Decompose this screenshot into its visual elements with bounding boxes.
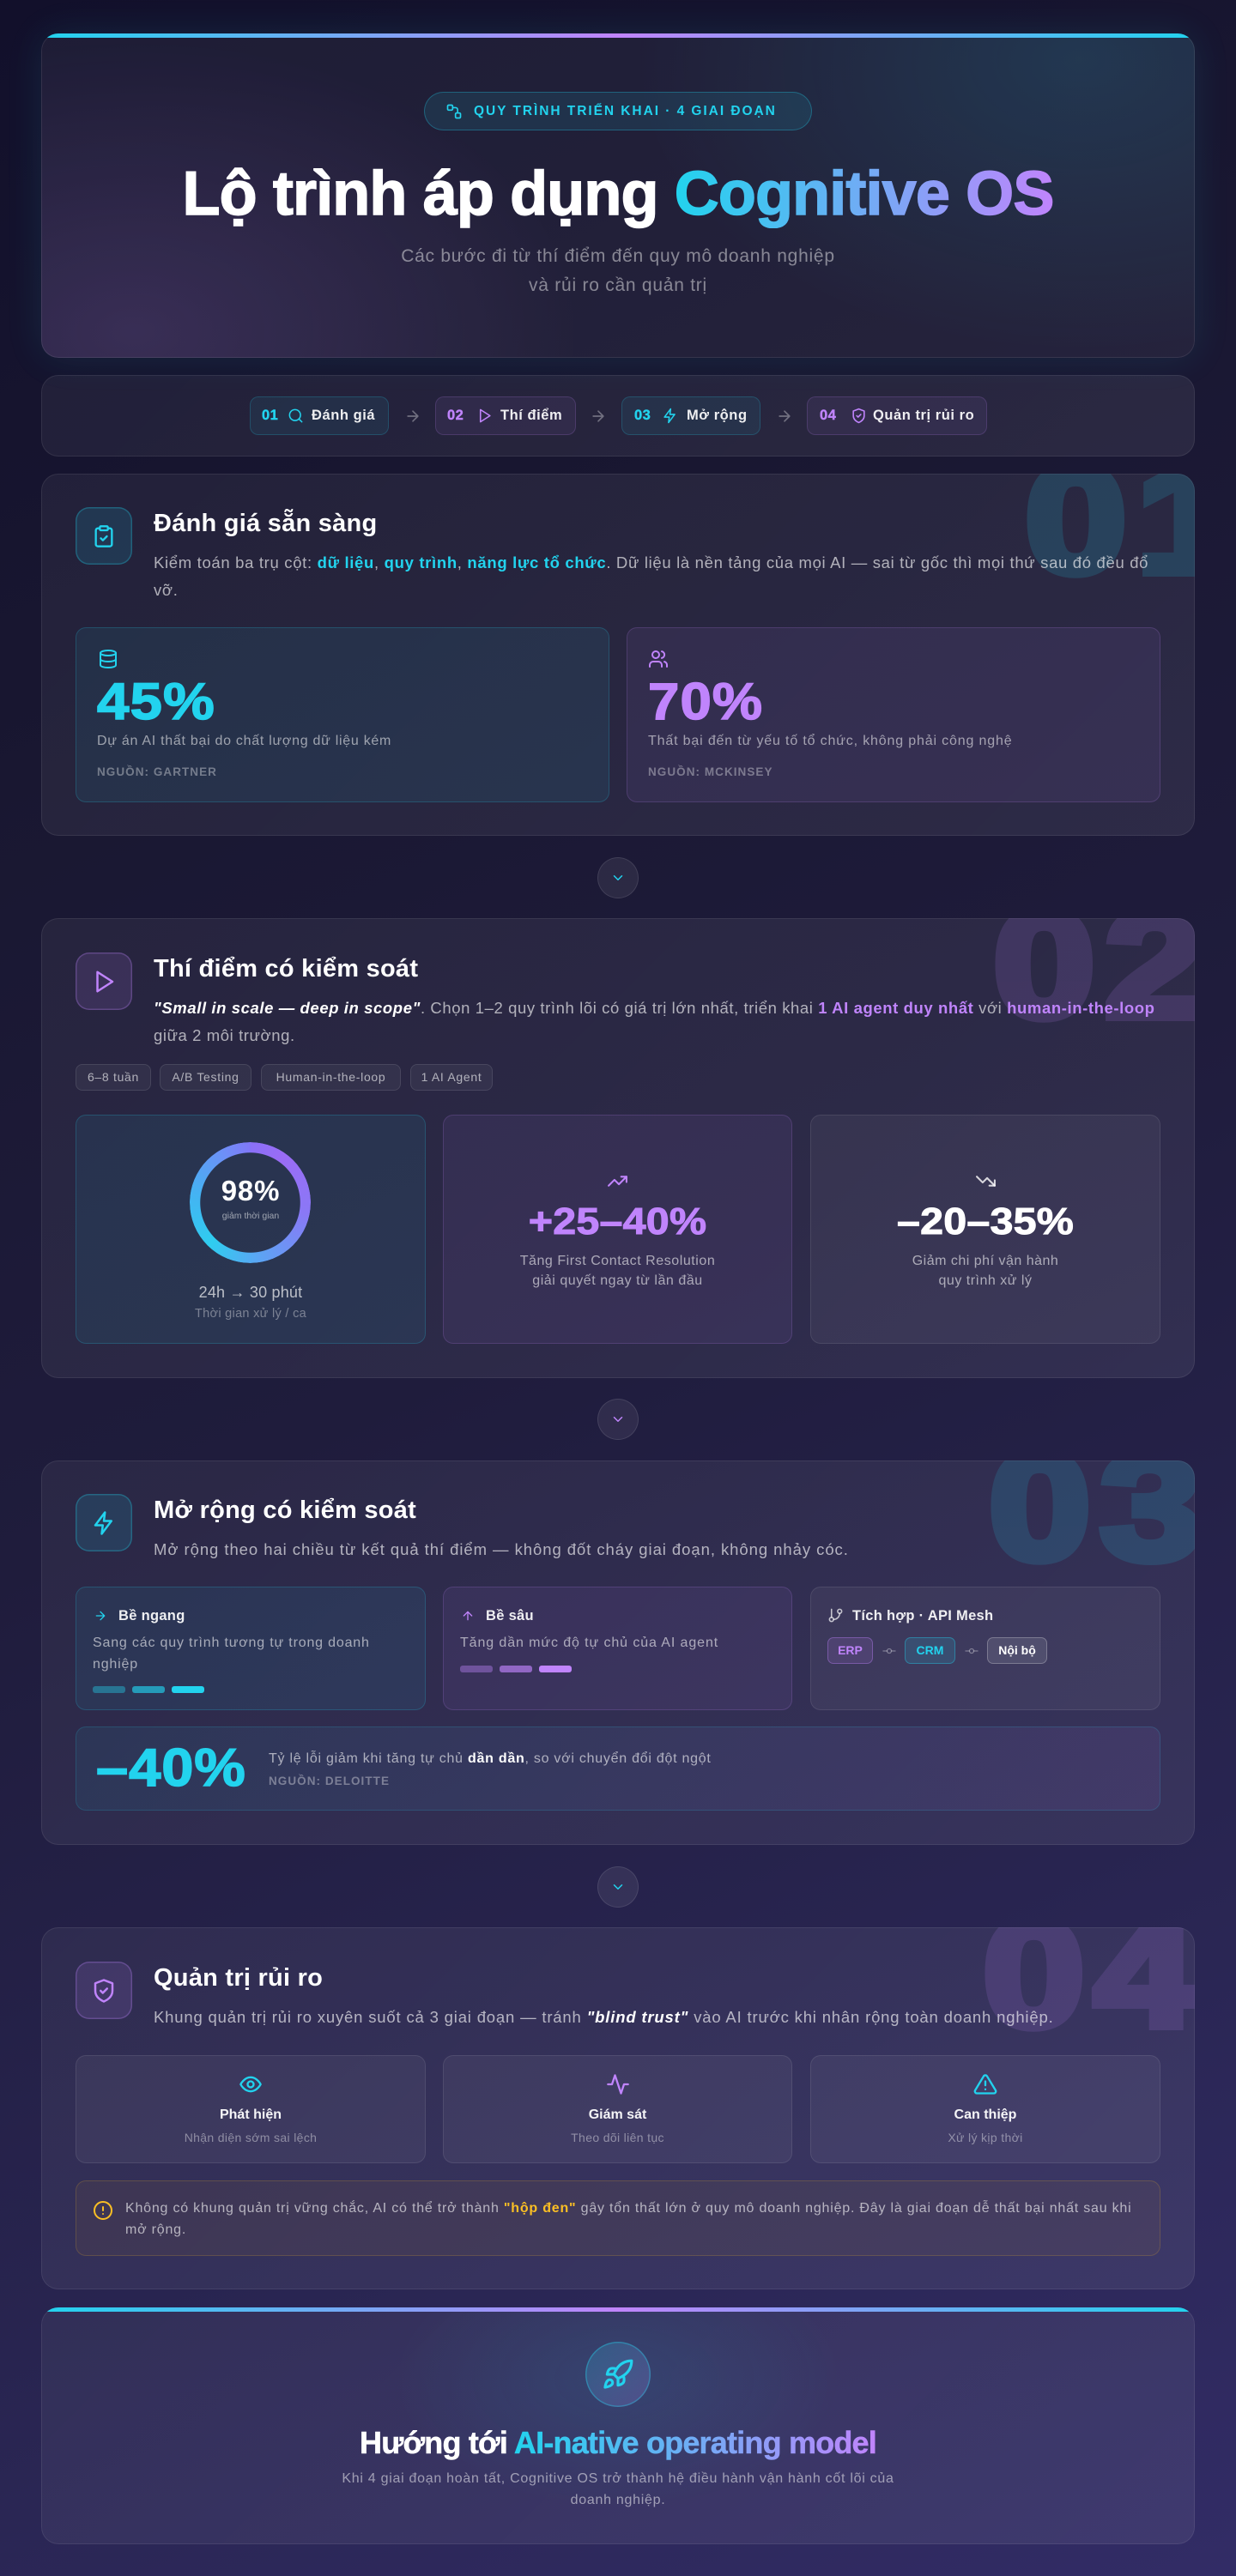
closing panel xyxy=(41,2307,1195,2544)
callout: -40%: Tỷ lệ lỗi giảm khi tăng tự chủ dần dần, so với chuyển đổi đột ngột xyxy=(269,1751,712,1766)
stat card: -20-35% xyxy=(810,1115,1160,1344)
closing text: Khi 4 giai đoạn hoàn tất, Cognitive OS trở thành hệ điều hành vận hành cốt lõi của xyxy=(342,2471,894,2486)
connector chevron 1 xyxy=(597,857,639,898)
heading: Quản trị rủi ro xyxy=(154,1964,323,1992)
tag: 1 AI Agent xyxy=(421,1070,482,1084)
heading: Đánh giá sẵn sàng xyxy=(154,510,377,537)
step 04: Quản trị rủi ro xyxy=(873,408,974,423)
callout: -40% xyxy=(76,1726,1160,1811)
arrow xyxy=(779,410,791,422)
stat card: ring 98%: Thời gian xử lý / ca xyxy=(195,1307,306,1321)
description: "Small in scale — deep in scope". Chọn 1–2 quy trình lõi có giá trị lớn nhất, triển khai 1 AI agent duy nhất với human-in-the-loop xyxy=(154,999,1155,1017)
heading: Mở rộng có kiểm soát xyxy=(154,1497,416,1524)
step 01 xyxy=(250,396,389,435)
tag: Human-in-the-loop xyxy=(276,1070,385,1084)
stat card: +25-40%: Tăng First Contact Resolution xyxy=(520,1254,715,1268)
icon: rocket xyxy=(585,2342,651,2407)
warning callout: Không có khung quản trị vững chắc, AI có thể trở thành "hộp đen" gây tổn thất lớn ở quy mô doanh nghiệp. Đây là giai đoạn dễ thất bại nhất sau khi xyxy=(125,2201,1131,2216)
step 01: 01 xyxy=(262,408,278,423)
warning callout xyxy=(76,2180,1160,2256)
stat card: ring 98% xyxy=(76,1115,426,1344)
stat card: +25-40%: +25–40% xyxy=(529,1200,706,1243)
card: vertical: Bề sâu xyxy=(486,1608,534,1624)
stat card: 45%: NGUỒN: GARTNER xyxy=(97,765,217,778)
step 04: 04 xyxy=(820,408,836,423)
stat card: -20-35%: Giảm chi phí vận hành xyxy=(912,1254,1058,1268)
card: API mesh: CRM xyxy=(917,1643,943,1657)
stat card: 70% xyxy=(627,627,1160,802)
connector chevron 2 xyxy=(597,1399,639,1440)
step 01: Đánh giá xyxy=(312,408,375,423)
card: intervene: Xử lý kịp thời xyxy=(948,2131,1023,2144)
tag xyxy=(410,1064,493,1091)
heading: Thí điểm có kiểm soát xyxy=(154,955,418,983)
description: giữa 2 môi trường. xyxy=(154,1026,295,1043)
badge: process xyxy=(424,92,812,130)
stat card: ring 98%: 24h → 30 phút xyxy=(199,1284,302,1301)
subtitle: Các bước đi từ thí điểm đến quy mô doanh nghiệp xyxy=(401,246,835,266)
card: API mesh: Tích hợp · API Mesh xyxy=(852,1608,993,1624)
card: monitor: Theo dõi liên tục xyxy=(571,2131,664,2144)
phase 02 panel xyxy=(41,918,1195,1378)
description: Khung quản trị rủi ro xuyên suốt cả 3 giai đoạn — tránh "blind trust" vào AI trước khi nhân rộng toàn doanh nghiệp. xyxy=(154,2008,1054,2026)
stat card: +25-40%: giải quyết ngay từ lần đầu xyxy=(532,1273,703,1288)
step 04 xyxy=(807,396,987,435)
stat card: ring 98%: 98% xyxy=(221,1175,280,1206)
description: vỡ. xyxy=(154,580,179,599)
card: intervene: Can thiệp xyxy=(954,2107,1016,2122)
step 02: Thí điểm xyxy=(500,408,562,423)
closing text xyxy=(342,2471,894,2507)
closing text: doanh nghiệp. xyxy=(571,2493,665,2507)
description: Kiểm toán ba trụ cột: dữ liệu, quy trình, năng lực tổ chức. Dữ liệu là nền tảng của mọi AI — sai từ gốc thì mọi thứ sau đó đều đổ xyxy=(154,553,1148,571)
subtitle xyxy=(401,246,835,295)
card: horizontal: Sang các quy trình tương tự trong doanh xyxy=(93,1636,370,1650)
subtitle: và rủi ro cần quản trị xyxy=(529,275,707,295)
stat card: 70%: 70% xyxy=(648,673,763,730)
tag: 6–8 tuần xyxy=(88,1070,139,1084)
card: horizontal: Bề ngang xyxy=(118,1608,185,1624)
card: horizontal: nghiệp xyxy=(93,1656,138,1672)
stat card: ring 98%: giảm thời gian xyxy=(222,1211,279,1221)
ring chart xyxy=(190,1142,311,1263)
stat card: 45%: Dự án AI thất bại do chất lượng dữ liệu kém xyxy=(97,734,391,748)
stepper panel xyxy=(41,375,1195,457)
badge: process: QUY TRÌNH TRIỂN KHAI · 4 GIAI ĐOẠN xyxy=(474,104,777,118)
arrow xyxy=(407,410,419,422)
stat card: +25-40% xyxy=(443,1115,792,1344)
card: vertical: Tăng dần mức độ tự chủ của AI agent xyxy=(460,1636,718,1650)
description xyxy=(154,553,1148,599)
card: API mesh: Nội bộ xyxy=(998,1643,1036,1657)
card: monitor: Giám sát xyxy=(589,2107,646,2122)
closing title: Hướng tới AI-native operating model xyxy=(360,2425,876,2460)
card: API mesh xyxy=(810,1587,1160,1710)
description xyxy=(154,999,1155,1044)
description: Mở rộng theo hai chiều từ kết quả thí điểm — không đốt cháy giai đoạn, không nhảy cóc. xyxy=(154,1540,849,1558)
warning callout: mở rộng. xyxy=(125,2222,186,2236)
step 03: Mở rộng xyxy=(687,408,748,423)
stat card: -20-35%: quy trình xử lý xyxy=(939,1273,1032,1288)
callout: -40%: –40% xyxy=(96,1738,246,1798)
phase icon: bolt xyxy=(76,1494,132,1551)
step 03: 03 xyxy=(634,408,651,423)
stat card: 45%: 45% xyxy=(97,673,215,730)
tag xyxy=(160,1064,251,1091)
stat card: 70%: Thất bại đến từ yếu tố tổ chức, không phải công nghệ xyxy=(648,734,1012,748)
arrow xyxy=(592,410,604,422)
card: detect xyxy=(76,2055,426,2163)
tag xyxy=(76,1064,151,1091)
connector chevron 3 xyxy=(597,1866,639,1908)
stat card: 45% xyxy=(76,627,609,802)
card: monitor xyxy=(443,2055,792,2163)
phase icon: clipboard xyxy=(76,507,132,565)
card: vertical xyxy=(443,1587,792,1710)
step 03 xyxy=(621,396,760,435)
phase icon: shield xyxy=(76,1962,132,2019)
phase 01 panel xyxy=(41,474,1195,836)
hero panel xyxy=(41,33,1195,358)
stat card: -20-35%: –20–35% xyxy=(897,1200,1074,1243)
card: intervene xyxy=(810,2055,1160,2163)
card: detect: Phát hiện xyxy=(220,2107,282,2122)
card: API mesh: ERP xyxy=(838,1643,863,1657)
title: Lộ trình áp dụng Cognitive OS xyxy=(182,160,1054,228)
phase icon: play xyxy=(76,952,132,1010)
card: horizontal xyxy=(76,1587,426,1710)
tag xyxy=(261,1064,401,1091)
stat card: 70%: NGUỒN: MCKINSEY xyxy=(648,765,773,778)
step 02: 02 xyxy=(447,408,464,423)
callout: -40%: NGUỒN: DELOITTE xyxy=(269,1775,390,1787)
phase 04 panel xyxy=(41,1927,1195,2289)
phase 03 panel xyxy=(41,1460,1195,1845)
card: detect: Nhận diện sớm sai lệch xyxy=(185,2131,317,2144)
tag: A/B Testing xyxy=(172,1070,239,1084)
step 02 xyxy=(435,396,576,435)
